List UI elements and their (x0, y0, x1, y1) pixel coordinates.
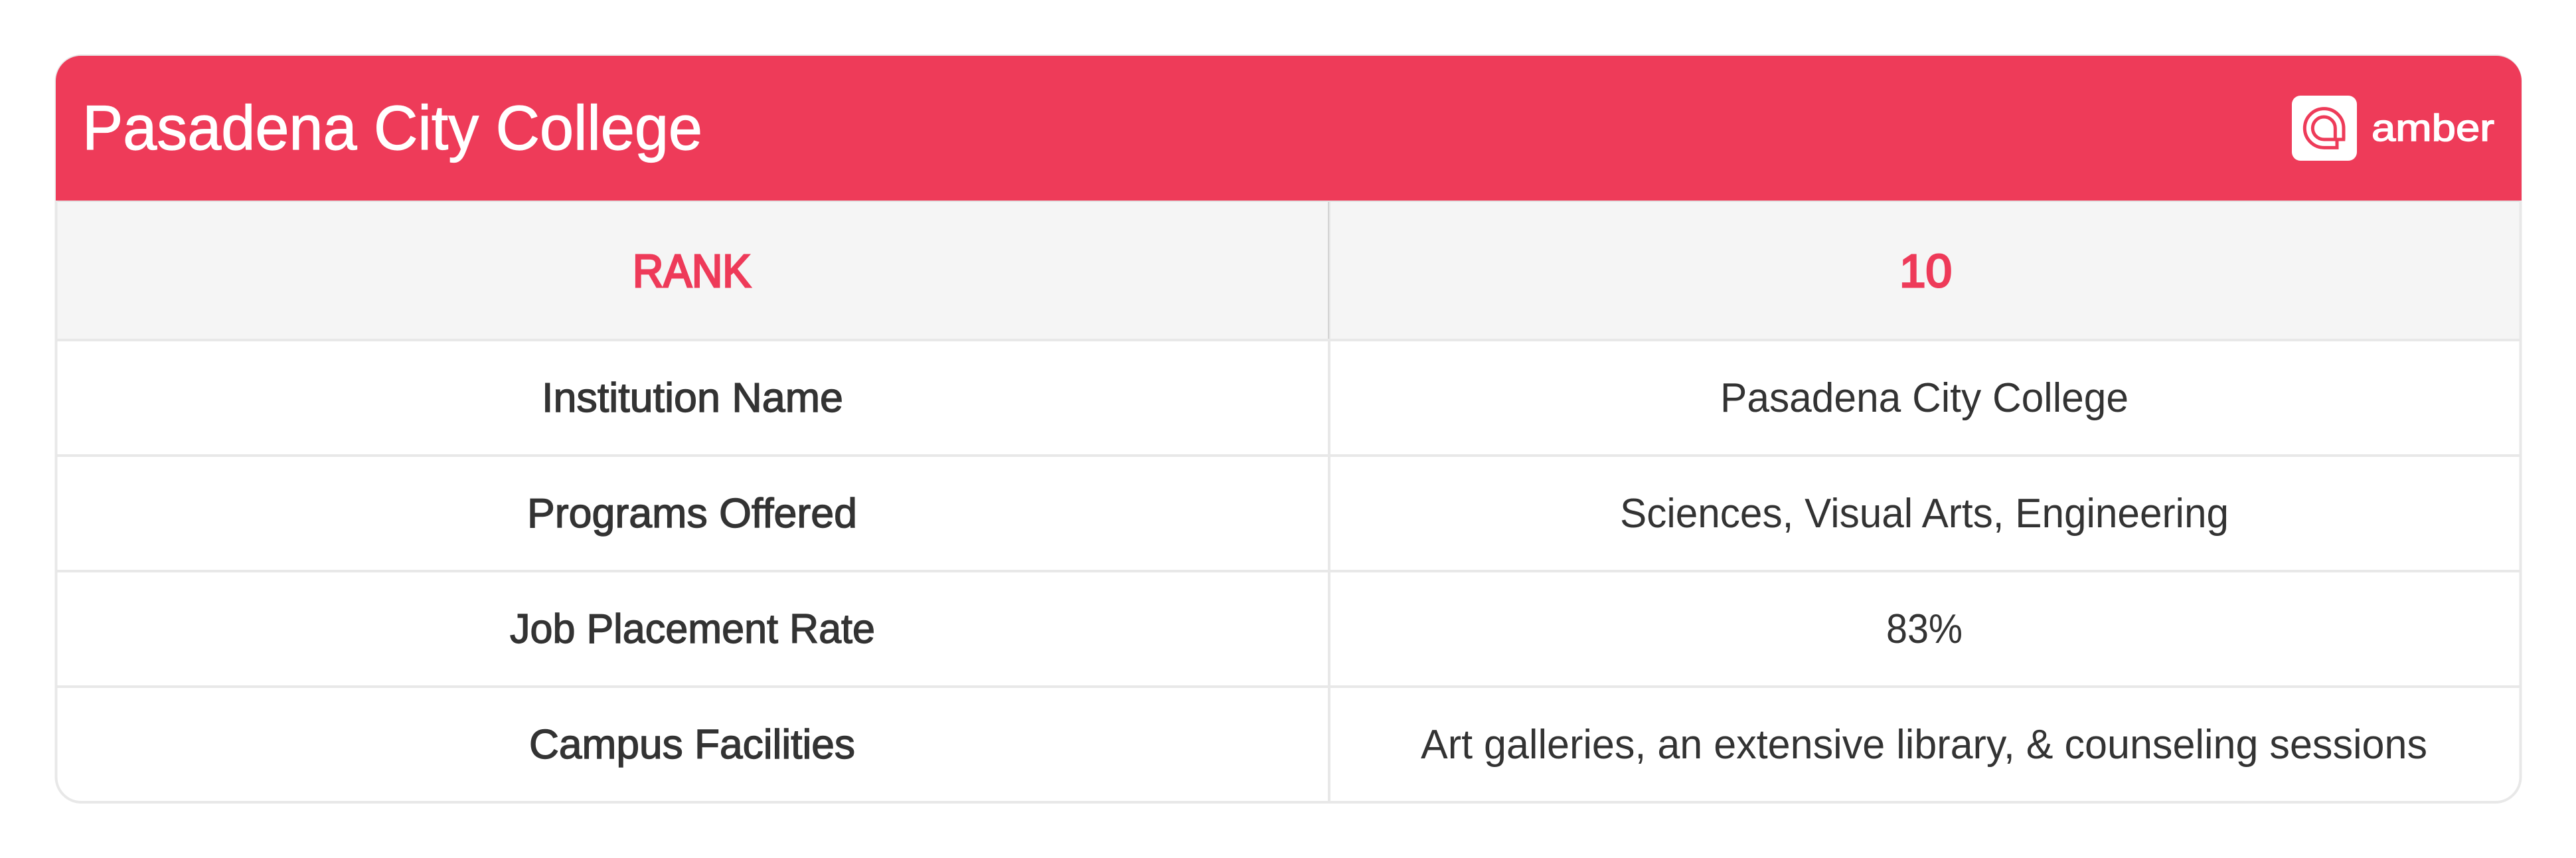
logo wordmark: amber (2372, 107, 2494, 149)
row value: campus facilities: Art galleries, an extensive library, & counseling sessions (1421, 721, 2427, 768)
row value: institution name: Pasadena City College (1720, 375, 2129, 421)
logo: amber (2292, 96, 2494, 161)
row label: programs offered: Programs Offered (527, 490, 857, 537)
rank label: RANK (633, 245, 751, 297)
row value: programs offered: Sciences, Visual Arts, Engineering (1620, 490, 2229, 537)
panel: header band (56, 56, 2522, 201)
title: Pasadena City College (82, 93, 702, 163)
row label: campus facilities: Campus Facilities (529, 721, 855, 768)
row label: institution name: Institution Name (542, 375, 843, 421)
row label: job placement rate: Job Placement Rate (510, 606, 875, 652)
rank value: 10 (1899, 245, 1952, 297)
icon: amber logo mark (2292, 96, 2357, 161)
row value: job placement rate: 83% (1886, 606, 1963, 652)
panel: rank row background (57, 201, 2520, 339)
